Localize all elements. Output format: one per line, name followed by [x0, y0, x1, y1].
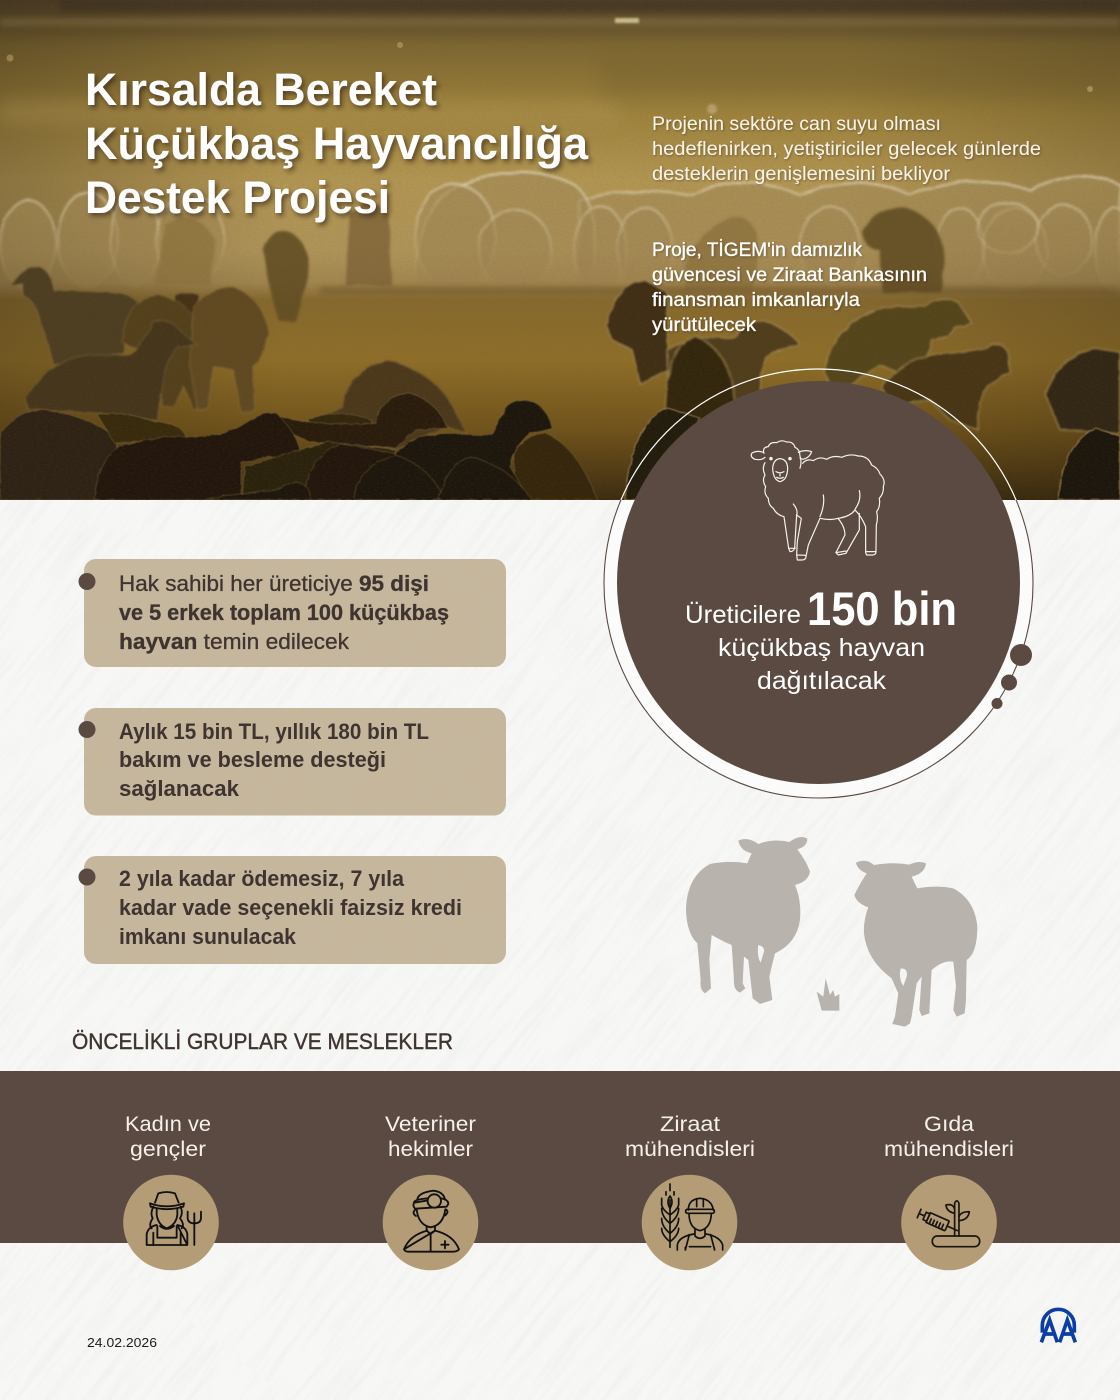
title — [85, 64, 589, 223]
text block: sector note: hedeflenirken, yetiştiriciler gelecek günlerde — [652, 139, 1041, 160]
label — [125, 1113, 211, 1161]
card 2 text — [119, 719, 429, 801]
label — [385, 1113, 476, 1161]
panel: benefit cards — [78, 559, 506, 964]
card 3 text: 2 yıla kadar ödemesiz, 7 yıla — [119, 866, 405, 891]
icon: wheat and engineer — [662, 1184, 723, 1250]
text block: project partners: yürütülecek — [652, 315, 757, 336]
icon: grass tuft — [817, 978, 839, 1011]
label: Gıda — [924, 1113, 974, 1136]
icon: progress dots on ring — [992, 644, 1032, 709]
icon: veterinarian — [404, 1191, 459, 1252]
group: agricultural engineers — [625, 1113, 755, 1270]
label: gençler — [130, 1138, 206, 1161]
callout text: dağıtılacak — [757, 667, 887, 695]
icon: left sheep — [686, 837, 810, 1004]
icon: right sheep — [854, 861, 977, 1027]
title: Kırsalda Bereket — [85, 64, 437, 115]
card 3 background — [84, 856, 506, 964]
text block: project partners: güvencesi ve Ziraat Bankasının — [652, 265, 927, 286]
logo: Anadolu Agency — [1041, 1309, 1075, 1342]
label: Ziraat — [660, 1113, 720, 1136]
card 1 text: hayvan temin edilecek — [119, 629, 350, 654]
icon: farmer woman — [147, 1192, 201, 1245]
photo: sheep herd in golden dust — [0, 0, 1120, 500]
card 1 background — [84, 559, 506, 667]
label: Veteriner — [385, 1113, 476, 1136]
label — [884, 1113, 1014, 1161]
card 3 text: imkanı sunulacak — [119, 924, 297, 949]
text block: sector note — [652, 114, 1041, 185]
card 2 text: Aylık 15 bin TL, yıllık 180 bin TL — [119, 719, 429, 744]
group: women and youth — [123, 1113, 219, 1270]
label — [625, 1113, 755, 1161]
label: mühendisleri — [625, 1138, 755, 1161]
callout text: Üreticilere — [685, 601, 801, 629]
card 3 text: kadar vade seçenekli faizsiz kredi — [119, 895, 462, 920]
callout text: 150 bin — [807, 582, 957, 635]
card 3 bullet — [78, 868, 96, 886]
title: Destek Projesi — [85, 172, 390, 223]
label: mühendisleri — [884, 1138, 1014, 1161]
card 2 text: sağlanacak — [119, 776, 240, 801]
title: Küçükbaş Hayvancılığa — [85, 118, 589, 169]
card 1 text: ve 5 erkek toplam 100 küçükbaş — [119, 600, 449, 625]
card 1 text: Hak sahibi her üreticiye 95 dişi — [119, 571, 429, 596]
card 1 bullet — [78, 573, 96, 590]
text block: sector note: Projenin sektöre can suyu olması — [652, 114, 941, 135]
card 1 text — [119, 571, 449, 654]
card 2 text: bakım ve besleme desteği — [119, 747, 386, 772]
text block: project partners: finansman imkanlarıyla — [652, 290, 860, 311]
icon circle — [383, 1175, 478, 1270]
group: food engineers — [884, 1113, 1014, 1270]
text block: project partners: Proje, TİGEM'in damızlık — [652, 240, 862, 261]
icon: syringe and plant — [917, 1201, 980, 1247]
icon: sheep outline — [751, 441, 884, 560]
band: priority groups — [0, 1071, 1120, 1243]
illustration: grey sheep silhouettes — [686, 837, 977, 1027]
card 2 bullet — [78, 721, 96, 738]
icon circle — [123, 1175, 219, 1270]
card 2 background — [84, 708, 506, 816]
icon circle — [901, 1175, 997, 1270]
text block: project partners — [652, 240, 927, 336]
text block: sector note: desteklerin genişlemesini bekliyor — [652, 164, 951, 185]
heading: priority groups: ÖNCELİKLİ GRUPLAR VE MESLEKLER — [72, 1029, 453, 1054]
callout text: küçükbaş hayvan — [718, 634, 925, 662]
label: hekimler — [388, 1138, 473, 1161]
icon circle — [642, 1175, 737, 1270]
date: 24.02.2026 — [87, 1335, 157, 1350]
label: Kadın ve — [125, 1113, 211, 1136]
group: veterinarians — [383, 1113, 478, 1270]
card 3 text — [119, 866, 462, 949]
panel: 150 bin callout circle — [604, 369, 1033, 798]
callout text — [685, 582, 957, 695]
